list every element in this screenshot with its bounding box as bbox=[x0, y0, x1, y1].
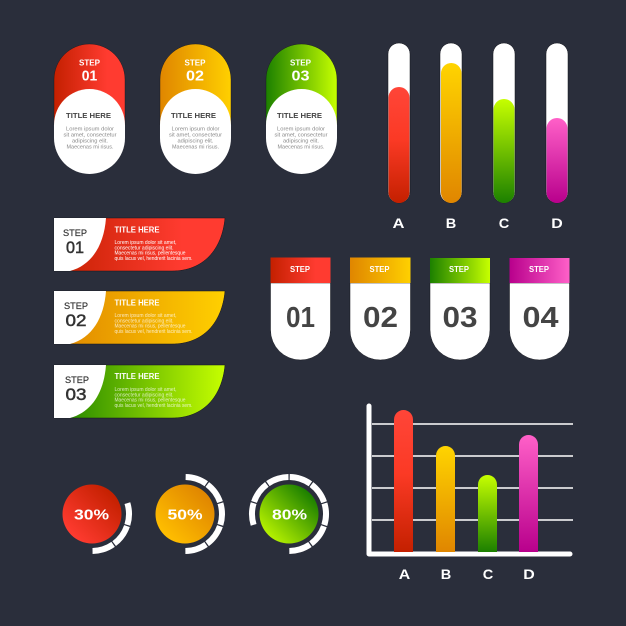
panel: step tab 03: 03 bbox=[442, 302, 478, 334]
bar B bbox=[440, 43, 462, 231]
panel: step pill 01: 01 bbox=[82, 68, 97, 84]
panel: banner step 03: consectetur adipiscing elit. bbox=[114, 392, 174, 398]
bar C: C bbox=[483, 566, 493, 582]
panel: step pill 02: Lorem ipsum dolor bbox=[172, 127, 220, 133]
panel: step pill 03: 03 bbox=[292, 68, 310, 84]
bar C: C bbox=[499, 215, 509, 231]
bar B bbox=[436, 446, 455, 582]
panel: banner step 01: consectetur adipiscing elit. bbox=[114, 245, 174, 251]
bar D bbox=[519, 435, 538, 582]
panel: banner step 02: 02 bbox=[66, 311, 86, 330]
bar D: D bbox=[551, 215, 563, 231]
chart: 50% radial gauge: 50% bbox=[168, 506, 202, 524]
panel: step pill 01: STEP bbox=[79, 58, 100, 68]
bar A: A bbox=[392, 215, 404, 231]
panel: step pill 03 bbox=[266, 44, 337, 174]
panel: banner step 02: Maecenas mi risus, pellentesque bbox=[114, 324, 186, 330]
panel: step pill 03: adipiscing elit. bbox=[283, 139, 319, 145]
bar B: B bbox=[446, 215, 456, 231]
panel: banner step 02: quis lacus vel, hendrerit lacinia sem. bbox=[114, 329, 192, 335]
bar D: D bbox=[523, 566, 535, 582]
chart: 80% radial gauge bbox=[243, 468, 335, 560]
panel: banner step 03: TITLE HERE bbox=[114, 372, 160, 381]
panel: step pill 01: TITLE HERE bbox=[66, 111, 111, 120]
chart: 50% radial gauge bbox=[147, 476, 223, 552]
panel: step pill 02: TITLE HERE bbox=[171, 111, 216, 120]
panel: step tab 01: 01 bbox=[286, 302, 315, 334]
panel: step pill 01 bbox=[54, 44, 125, 174]
panel: step tab 03: STEP bbox=[449, 265, 470, 274]
panel: step tab 01: STEP bbox=[290, 265, 311, 274]
chart: bar chart bbox=[369, 406, 573, 582]
panel: step pill 02: STEP bbox=[184, 58, 206, 68]
panel: step pill 03: Lorem ipsum dolor bbox=[277, 127, 325, 133]
bar A: A bbox=[399, 566, 410, 582]
panel: step tab 04 bbox=[510, 258, 570, 360]
panel: banner step 02: consectetur adipiscing elit. bbox=[114, 318, 174, 324]
panel: step pill 02 bbox=[160, 44, 231, 174]
panel: step pill 03: TITLE HERE bbox=[277, 111, 322, 120]
panel: banner step 01: 01 bbox=[66, 238, 84, 257]
panel: banner step 02 bbox=[54, 291, 225, 344]
panel: step tab 04: 04 bbox=[522, 302, 558, 334]
panel: step pill 02: sit amet, consectetur bbox=[169, 133, 222, 139]
panel: banner step 03: STEP bbox=[65, 375, 89, 386]
panel: step tab 02: 02 bbox=[363, 302, 398, 334]
panel: banner step 01: quis lacus vel, hendrerit lacinia sem. bbox=[114, 256, 192, 262]
panel: step tab 02: STEP bbox=[370, 265, 390, 274]
panel: step pill 03: sit amet, consectetur bbox=[274, 133, 328, 139]
bar B: B bbox=[441, 566, 451, 582]
chart: 80% radial gauge: 80% bbox=[272, 506, 307, 524]
chart: vertical progress bars bbox=[388, 43, 568, 231]
bar A bbox=[394, 410, 413, 582]
panel: banner step 01: Maecenas mi risus, pellentesque bbox=[114, 251, 186, 257]
panel: step tab 02 bbox=[350, 258, 410, 360]
bar A bbox=[388, 43, 410, 231]
chart: 30% radial gauge: 30% bbox=[74, 506, 109, 524]
panel: step pill 01: adipiscing elit. bbox=[72, 139, 108, 145]
panel: step tab 03 bbox=[430, 258, 490, 360]
panel: banner step 03: Maecenas mi risus, pellentesque bbox=[114, 398, 186, 404]
panel: banner step 03: quis lacus vel, hendrerit lacinia sem. bbox=[114, 403, 192, 409]
panel: step pill 03: STEP bbox=[290, 58, 311, 68]
chart: 30% radial gauge bbox=[46, 468, 138, 560]
panel: step tab 04: STEP bbox=[529, 265, 550, 274]
panel: banner step 01: TITLE HERE bbox=[114, 226, 160, 234]
panel: step pill 01: Maecenas mi risus. bbox=[66, 145, 114, 151]
panel: banner step 01: STEP bbox=[63, 228, 87, 239]
panel: banner step 02: STEP bbox=[64, 301, 88, 312]
panel: banner step 01: Lorem ipsum dolor sit amet, bbox=[114, 240, 176, 246]
panel: step tab 01 bbox=[270, 258, 330, 360]
panel: banner step 01 bbox=[54, 218, 225, 271]
panel: step pill 02: Maecenas mi risus. bbox=[172, 145, 219, 151]
panel: step pill 01: Lorem ipsum dolor bbox=[66, 127, 114, 133]
panel: step pill 02: adipiscing elit. bbox=[178, 139, 214, 145]
panel: banner step 03: Lorem ipsum dolor sit amet, bbox=[114, 387, 176, 393]
panel: banner step 02: TITLE HERE bbox=[114, 298, 160, 308]
bar C bbox=[493, 43, 515, 231]
bar D bbox=[546, 43, 568, 231]
panel: step pill 02: 02 bbox=[186, 68, 204, 84]
panel: banner step 03 bbox=[54, 365, 225, 418]
bar C bbox=[478, 475, 497, 582]
panel: banner step 03: 03 bbox=[66, 385, 86, 404]
panel: banner step 02: Lorem ipsum dolor sit amet, bbox=[114, 313, 176, 319]
panel: step pill 03: Maecenas mi risus. bbox=[278, 145, 324, 151]
panel: step pill 01: sit amet, consectetur bbox=[64, 133, 117, 139]
